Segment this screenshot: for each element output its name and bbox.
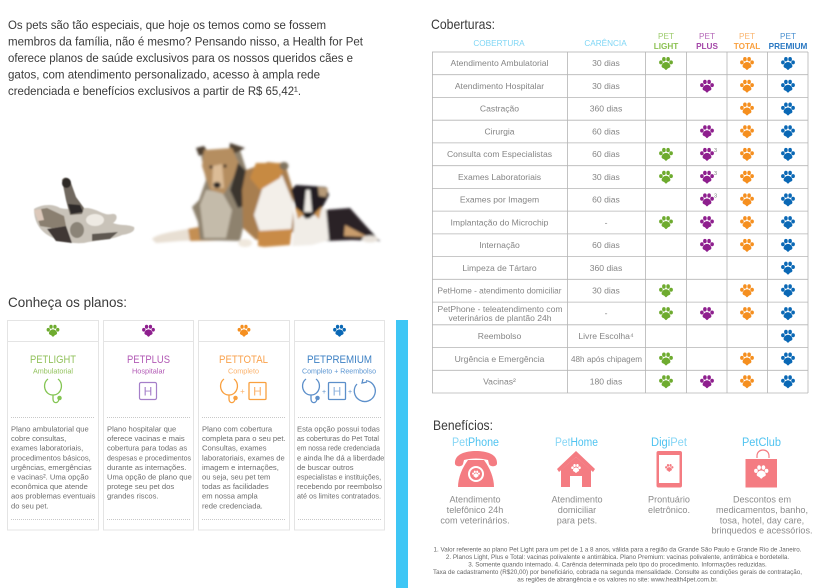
intro text: Os pets são tão especiais, que hoje os temos como se fossem	[8, 18, 326, 32]
row: Atendimento Hospitalar: Atendimento Hospitalar	[455, 81, 544, 91]
row: PetPhone: veterinários de plantão 24h	[448, 313, 552, 323]
icon: stethoscope plus hospital plus refund: H	[333, 384, 341, 398]
benefit: DigiPet: DigiPet	[651, 437, 688, 449]
PetLight description: cobre consultas,	[11, 434, 66, 443]
PetPremium description: em nossa rede credenciada	[297, 444, 381, 452]
PetTotal description: Plano com cobertura	[202, 424, 273, 434]
PetHome description	[551, 494, 603, 526]
PetPremium subtitle: Completo + Reembolso	[302, 368, 376, 376]
intro text: oferece planos de saúde exclusivos para os nossos queridos cães e	[8, 51, 353, 65]
PetLight description: e vacinas². Uma opção	[11, 472, 89, 482]
row: Atendimento Ambulatorial: Atendimento Ambulatorial	[451, 58, 549, 68]
row: PetHome: PetHome - atendimento domiciliar	[438, 286, 562, 296]
benefit: PetHome: PetHome	[555, 437, 598, 449]
PetPremium description: as coberturas do Pet Total	[297, 434, 379, 443]
PetClub description: brinquedos e acessórios.	[711, 526, 813, 536]
footnotes: as regiões de abrangência e os valores no site: www.health4pet.com.br.	[517, 576, 718, 584]
PetPremium description: especialistas e instituições,	[297, 472, 381, 482]
PetTotal description: rede credenciada.	[202, 502, 263, 510]
row: Vacinas: 180 dias	[590, 376, 622, 386]
PetTotal description: em nossa ampla	[202, 492, 258, 500]
DigiPet description: eletrônico.	[648, 505, 690, 515]
row: PetPhone	[438, 304, 795, 323]
PetPlus description: grandes riscos.	[107, 492, 158, 500]
icon: blue paw	[333, 325, 346, 337]
PetTotal name: PETTOTAL	[219, 354, 268, 366]
table header	[473, 32, 808, 51]
PetPremium description: até os limites contratados.	[297, 492, 381, 500]
row: Atendimento Hospitalar: 30 dias	[592, 81, 620, 91]
PetPlus description: Uma opção de plano que	[107, 472, 192, 482]
benefit: PetClub: PetClub	[742, 437, 781, 449]
PetHome description: Atendimento	[551, 494, 603, 504]
PetPlus description: Plano hospitalar que	[107, 424, 176, 434]
icon: stethoscope plus hospital	[221, 379, 266, 403]
row: PetPhone: -	[605, 308, 608, 318]
collie middle	[242, 162, 294, 240]
PetTotal subtitle: Completo	[228, 368, 259, 376]
row: Castração: 360 dias	[590, 104, 622, 114]
heading: Benefícios: Benefícios:	[433, 418, 493, 433]
row: Exames Laboratoriais	[458, 171, 795, 184]
row: Consulta com Especialistas: 60 dias	[592, 149, 620, 159]
PetPlus description: protege seu pet dos	[107, 482, 174, 491]
row: Limpeza de Tártaro	[462, 262, 795, 275]
table header: PET	[739, 32, 755, 41]
benefit: PetPhone: PetPhone	[452, 437, 499, 449]
icon: purple paw	[142, 325, 155, 337]
table header: TOTAL	[734, 42, 760, 51]
DigiPet description: Prontuário	[648, 494, 690, 504]
row: Exames por Imagem: 60 dias	[592, 194, 620, 204]
icon: green paw	[47, 325, 59, 337]
PetPremium description	[297, 424, 384, 500]
PetLight subtitle: Ambulatorial	[33, 368, 73, 376]
PetHome description: para pets.	[557, 516, 597, 526]
table header: PLUS	[696, 42, 718, 51]
PetHome description: domiciliar	[558, 505, 596, 515]
PetPlus description: oferece vacinas e mais	[107, 434, 185, 443]
PetTotal description	[202, 424, 286, 510]
PetTotal description: todas as facilidades	[202, 482, 269, 491]
icon: stethoscope plus hospital: H	[253, 384, 262, 398]
icon: stethoscope plus hospital plus refund	[303, 379, 375, 403]
blue vertical bar	[396, 320, 408, 588]
table header: CARÊNCIA	[584, 38, 627, 48]
footnotes	[433, 546, 802, 584]
row: Internação: 60 dias	[592, 240, 620, 250]
panel: PetTotal	[198, 320, 290, 530]
PetClub description: medicamentos, banho,	[716, 505, 808, 515]
icon: stethoscope plus hospital plus refund: +	[322, 389, 326, 396]
PetPhone description: telefônico 24h	[447, 505, 503, 515]
row: Urgência e Emergência	[455, 352, 795, 366]
PetLight description: econômica que atende	[11, 482, 88, 491]
heading: Conheça os planos: Conheça os planos:	[8, 295, 127, 310]
PetPremium description: de buscar outros	[297, 463, 354, 472]
row: Limpeza de Tártaro: 360 dias	[590, 263, 622, 273]
coverage table	[432, 52, 808, 393]
row: Cirurgia: 60 dias	[592, 126, 620, 136]
table grid	[432, 52, 808, 393]
PetPremium description: Esta opção possui todas	[297, 424, 380, 434]
icon: orange paw	[238, 325, 250, 337]
PetPlus description: cobertura para todas as	[107, 444, 187, 452]
intro text: credenciada e benefícios exclusivos a partir de R$ 65,42¹.	[8, 84, 301, 98]
PetPlus name: PETPLUS	[127, 354, 170, 366]
table header: PET	[699, 32, 715, 41]
row: Exames por Imagem: Exames por Imagem	[460, 194, 539, 204]
icon: hospital	[140, 382, 156, 400]
row: Urgência e Emergência: Urgência e Emergência	[455, 354, 545, 364]
PetLight description: exames laboratoriais,	[11, 444, 83, 452]
row: Consulta com Especialistas: Consulta com Especialistas	[447, 149, 552, 159]
PetClub description: Descontos em	[733, 494, 791, 504]
PetTotal description: ou seja, seu pet tem	[202, 472, 270, 482]
row: Exames por Imagem: 3	[714, 194, 717, 200]
icon: stethoscope plus hospital: +	[240, 387, 245, 396]
PetPhone description: Atendimento	[449, 494, 501, 504]
icon: stethoscope	[45, 379, 61, 403]
footnotes: Taxa de cadastramento (R$20,00) por beneficiário, cobrada na segunda mensalidade. Consulte as condições gerais de contratação,	[433, 569, 802, 576]
footnotes: 3. Somente quando internado. 4. Carência determinada pelo tipo do procedimento. Informações reduzidas.	[468, 562, 767, 568]
PetPlus description: despesas e procedimentos	[107, 454, 191, 462]
table header: PET	[658, 32, 674, 41]
PetTotal description: laboratoriais, exames de	[202, 454, 285, 462]
row: PetHome	[438, 284, 795, 297]
row: Internação: Internação	[479, 240, 520, 250]
row: Internação	[479, 239, 795, 252]
row: Exames Laboratoriais: 30 dias	[592, 172, 620, 182]
row: PetPhone: PetPhone - teleatendimento com	[438, 304, 562, 314]
row: Cirurgia	[484, 125, 795, 138]
PetTotal description: completa para o seu pet.	[202, 434, 286, 443]
intro text	[8, 18, 364, 98]
heading: Coberturas: Coberturas:	[431, 17, 495, 32]
icon: stethoscope plus hospital plus refund: +	[348, 389, 352, 396]
row: Urgência e Emergência: 48h após chipagem	[571, 354, 642, 364]
row: Atendimento Hospitalar	[455, 80, 795, 93]
row: Reembolso: Livre Escolha⁴	[578, 331, 634, 341]
PetPhone description	[440, 494, 510, 526]
benefit: PetClub	[711, 437, 813, 536]
PetPhone description: com veterinários.	[440, 516, 510, 526]
panel: PetLight	[8, 320, 98, 530]
PetClub description: tosa, hotel, day care,	[720, 516, 804, 526]
icon: tablet	[656, 451, 682, 488]
row: Reembolso	[478, 330, 795, 343]
collie large	[152, 226, 204, 243]
table header: LIGHT	[654, 42, 678, 51]
row: Atendimento Ambulatorial	[451, 57, 795, 70]
icon: shopping bag	[746, 450, 777, 488]
benefit: DigiPet	[648, 437, 690, 515]
intro text: gatos, com atendimento personalizado, acesso à ampla rede	[8, 68, 320, 82]
PetLight description: do seu pet.	[11, 502, 49, 510]
footnotes: 1. Valor referente ao plano Pet Light para um pet de 1 a 8 anos, válida para a região da Grande São Paulo e Grande Rio de Janeiro.	[434, 546, 802, 554]
row: Limpeza de Tártaro: Limpeza de Tártaro	[462, 263, 537, 273]
PetLight description	[11, 424, 96, 510]
PetLight description: Plano ambulatorial que	[11, 424, 89, 434]
PetTotal description: imagem e internações,	[202, 463, 279, 472]
row: Implantação do Microchip: Implantação do Microchip	[451, 218, 549, 228]
row: Exames Laboratoriais: Exames Laboratoriais	[458, 172, 541, 182]
PetClub description	[711, 494, 813, 536]
PetPremium name: PETPREMIUM	[307, 354, 372, 366]
cat	[34, 178, 134, 243]
row: Castração: Castração	[480, 104, 519, 114]
puppy	[324, 208, 380, 241]
panel: PetPremium	[294, 320, 384, 530]
row: Implantação do Microchip	[451, 216, 795, 229]
PetLight description: procedimentos básicos,	[11, 454, 91, 462]
row: PetHome: 30 dias	[592, 286, 620, 296]
PetPlus description: durante as internações.	[107, 463, 186, 472]
row: Vacinas	[483, 375, 795, 388]
DigiPet description	[648, 494, 690, 515]
row: Cirurgia: Cirurgia	[484, 126, 515, 136]
row: Implantação do Microchip: -	[605, 218, 608, 228]
icon: house	[557, 451, 595, 487]
row: Exames por Imagem	[460, 193, 795, 206]
row: Reembolso: Reembolso	[478, 331, 521, 341]
icon: telephone	[455, 451, 497, 487]
intro text: membros da família, não é mesmo? Pensando nisso, a Health for Pet	[8, 34, 364, 48]
PetLight description: urgências, emergências	[11, 463, 92, 472]
photo: cat and dogs	[34, 143, 380, 247]
row: Atendimento Ambulatorial: 30 dias	[592, 58, 620, 68]
PetPlus description	[107, 424, 192, 500]
row: Exames Laboratoriais: 3	[714, 171, 717, 177]
footnotes: 2. Planos Light, Plus e Total: vacinas polivalente e antirrábica. Plano Premium: vacinas polivalente, antirrábica e bordetella.	[446, 554, 789, 561]
table header: PET	[780, 32, 796, 41]
PetPremium description: e ainda lhe dá a liberdade	[297, 454, 384, 462]
benefit: PetHome	[551, 437, 603, 526]
PetPremium description: recebendo por reembolso	[297, 482, 382, 491]
row: Castração	[480, 102, 795, 116]
table header: PREMIUM	[769, 42, 808, 51]
row: Vacinas: Vacinas²	[483, 376, 516, 386]
row: Consulta com Especialistas: 3	[714, 148, 717, 154]
PetLight name: PETLIGHT	[30, 354, 76, 366]
PetTotal description: Consultas, exames	[202, 444, 267, 452]
row: Consulta com Especialistas	[447, 148, 795, 161]
PetLight description: aos problemas eventuais	[11, 492, 96, 500]
table header: COBERTURA	[473, 39, 525, 48]
icon: hospital: H	[144, 384, 152, 398]
benefit: PetPhone	[440, 437, 510, 526]
panel: PetPlus	[104, 320, 194, 530]
PetPlus subtitle: Hospitalar	[132, 368, 166, 376]
